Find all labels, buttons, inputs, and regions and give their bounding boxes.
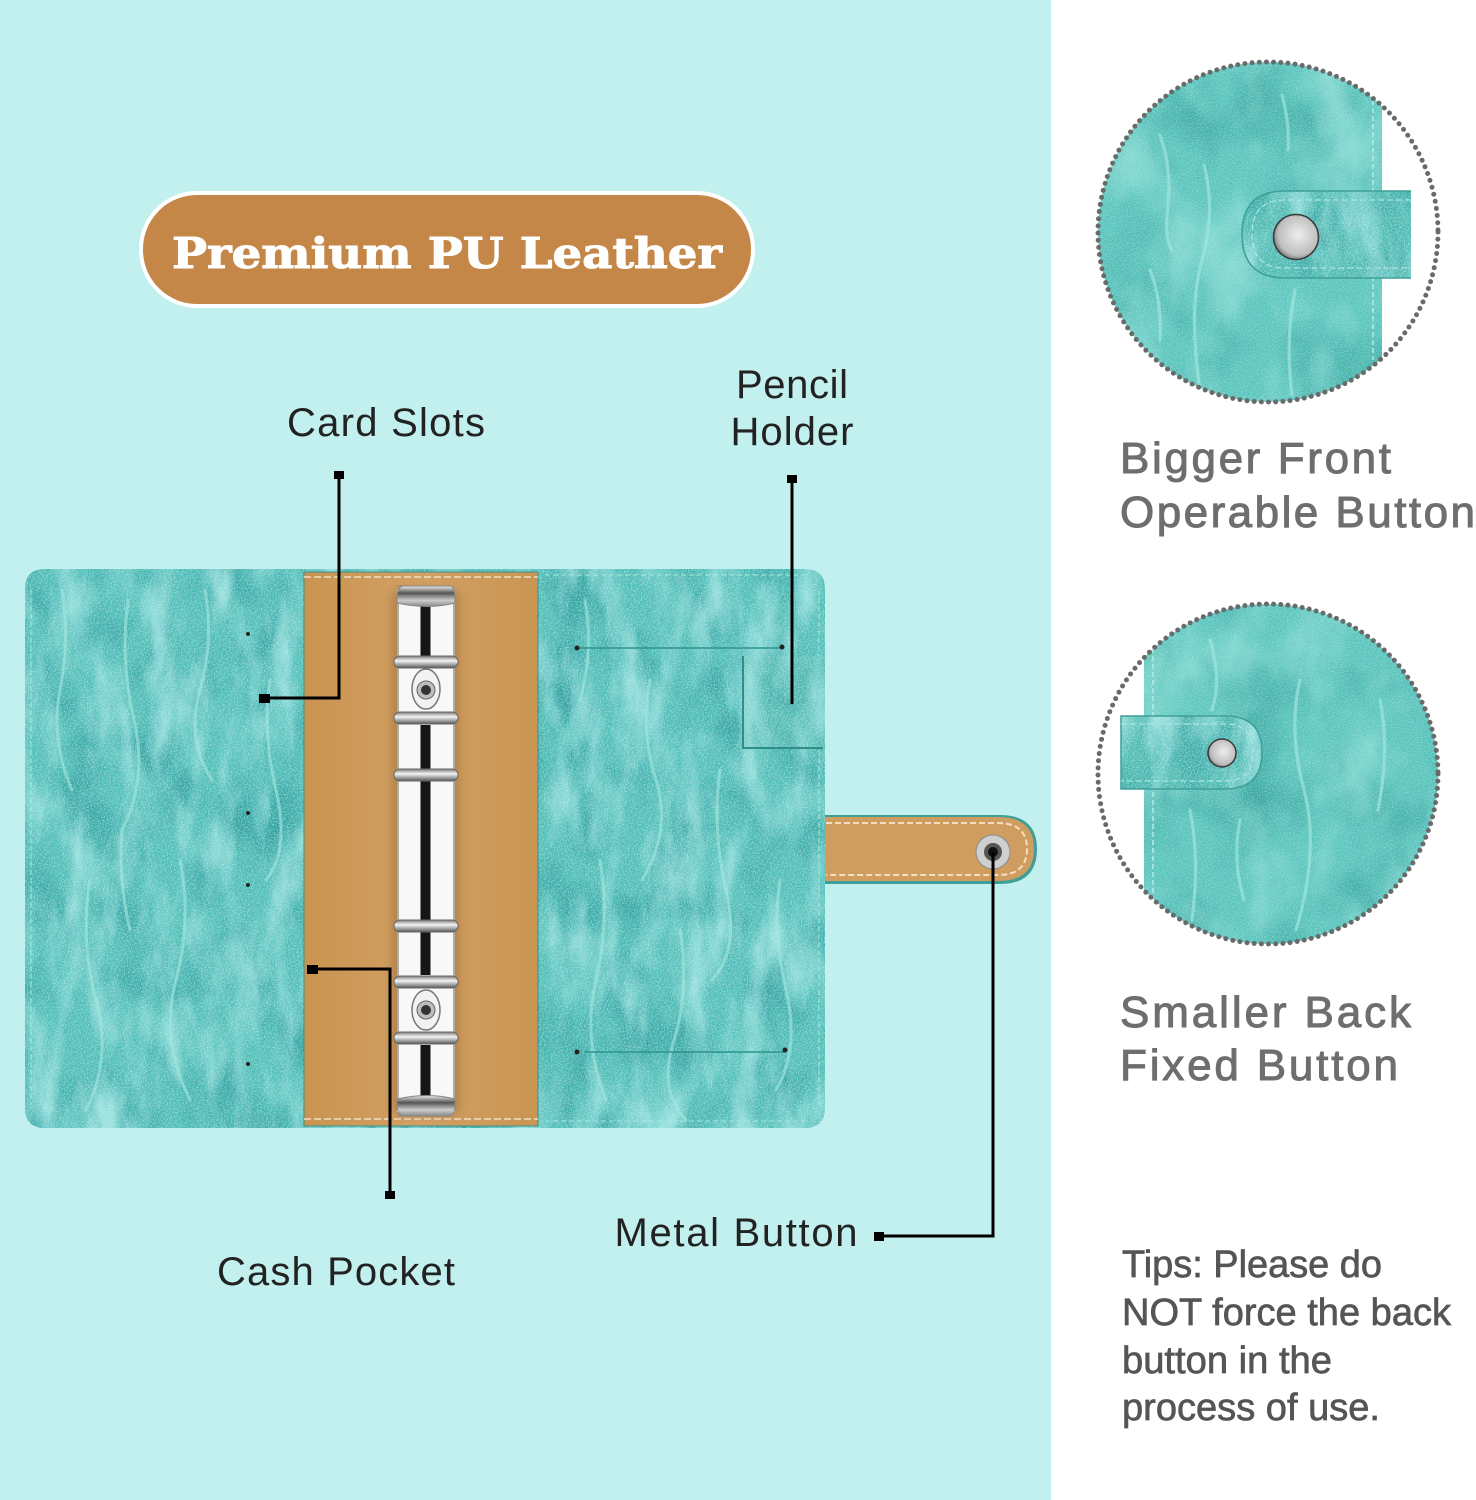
text: Bigger Front Operable Button: Bigger Front [1120,434,1391,483]
leather creases [57,590,791,1120]
text: Smaller Back Fixed Button: Fixed Button [1120,1041,1398,1090]
callout: Pencil Holder: Pencil [736,363,848,407]
background: left mint panel [0,0,1051,1500]
callout: Pencil Holder [730,363,854,704]
pocket lines and stitches [577,648,785,1052]
text: tips [1122,1244,1452,1429]
detail circle: back button [1098,604,1440,944]
front strap [1240,189,1412,280]
text: tips: Tips: Please do [1122,1244,1382,1286]
callout: Card Slots: Card Slots [287,401,485,445]
dotted ring [1098,604,1438,944]
text: Bigger Front Operable Button: Operable Button [1120,488,1475,537]
dotted ring [1098,62,1438,402]
detail circle: front button [1098,62,1438,402]
text: tips: NOT force the back [1122,1292,1452,1334]
spine stitching [304,577,538,1119]
title badge: Premium PU Leather: Premium PU Leather [172,229,723,278]
tan spine panel [304,572,538,1126]
text: Smaller Back Fixed Button: Smaller Back [1120,988,1412,1037]
pencil holder tab [743,656,823,748]
text: Bigger Front Operable Button [1120,434,1475,537]
back strap [1120,714,1264,791]
binder illustration [25,569,1037,1128]
strap [820,815,1037,884]
callout: Metal Button: Metal Button [614,1211,858,1255]
cover stitching [31,575,819,1121]
back metal button [1208,739,1236,767]
front metal button [1274,214,1318,260]
teal leather cover [25,569,825,1128]
callout: Pencil Holder: Holder [730,410,854,454]
title badge: Premium PU Leather [141,193,753,306]
callout: Cash Pocket [217,965,455,1294]
text: tips: process of use. [1122,1387,1380,1429]
callout: Card Slots [259,401,485,703]
ring mechanism [392,586,459,1116]
text: Smaller Back Fixed Button [1120,988,1412,1090]
text: tips: button in the [1122,1340,1332,1382]
callout: Metal Button [614,852,993,1255]
callout: Cash Pocket: Cash Pocket [217,1250,455,1294]
